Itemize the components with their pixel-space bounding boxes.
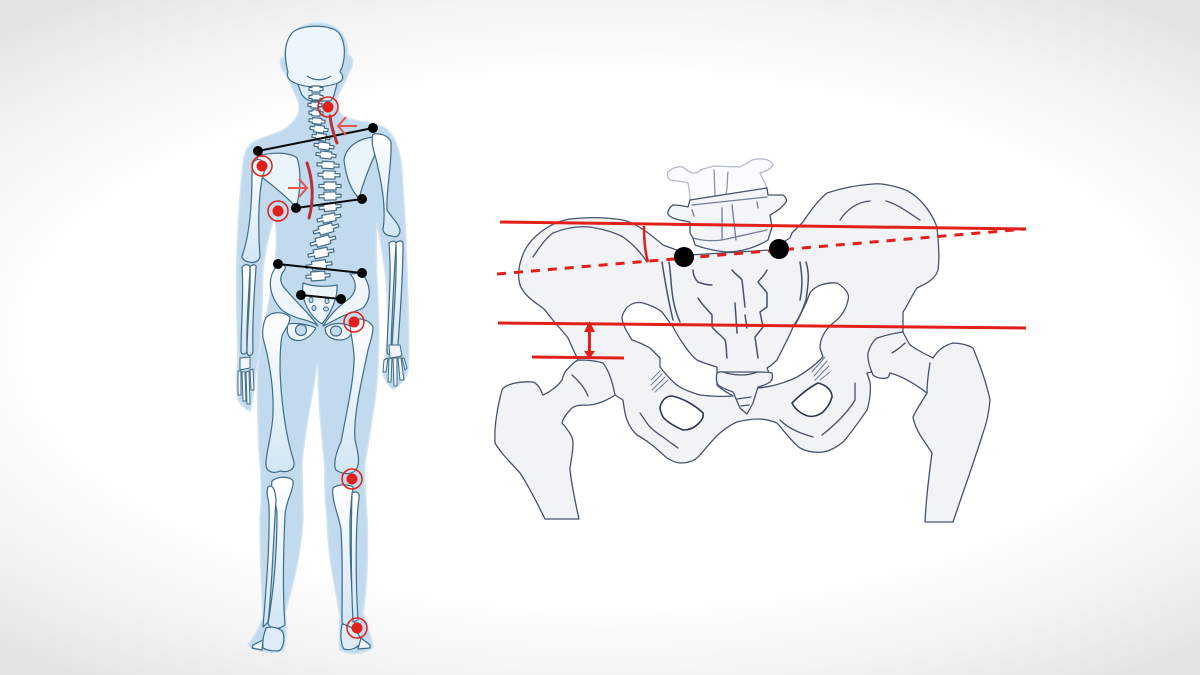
right fibula	[351, 492, 359, 622]
right forearm bones	[387, 241, 396, 354]
sacral foramina lines	[662, 262, 808, 358]
left femur	[495, 360, 615, 519]
right pelvic window	[758, 283, 848, 388]
obturator foramina	[296, 324, 342, 336]
figure: full body skeleton with markers	[236, 23, 409, 654]
left hand bones	[238, 357, 254, 404]
reference line: tilted dashed pelvic axis	[497, 229, 1026, 274]
left pubic bone	[287, 323, 316, 340]
body silhouette	[236, 23, 409, 654]
sacrum	[303, 283, 337, 324]
pain target: rib	[268, 201, 288, 221]
arrow: toward thoracic curve	[288, 179, 307, 197]
reference line: lower level	[498, 323, 1026, 328]
pelvis: left ilium	[270, 265, 318, 326]
coccyx crease	[723, 372, 757, 406]
double arrow: height difference	[584, 321, 595, 359]
left iliac crest inner line	[533, 227, 647, 262]
left foot	[263, 627, 284, 651]
right femur	[868, 332, 990, 522]
sacral foramina	[309, 298, 329, 311]
vertebra detail lines	[692, 197, 767, 241]
right acetabular hatching	[812, 357, 830, 380]
right humerus	[372, 134, 400, 237]
right landmark dot	[769, 239, 789, 259]
jaw curve	[307, 76, 331, 80]
curved muscle strain lines	[307, 116, 337, 218]
right scapula	[344, 137, 377, 198]
right foot	[341, 624, 361, 650]
arrow: toward neck	[338, 117, 357, 135]
pelvis diagram	[495, 159, 1026, 522]
pain target: ankle	[347, 618, 367, 638]
right femur	[335, 319, 373, 474]
left forearm bones	[241, 265, 250, 354]
pain target: neck	[318, 97, 338, 117]
left femur	[263, 313, 294, 472]
left tibia	[268, 477, 293, 629]
left fibula	[263, 486, 276, 627]
pain target: shoulder	[252, 156, 272, 176]
left landmark dot	[674, 247, 694, 267]
pelvis bones illustration	[495, 159, 990, 522]
lower lumbar vertebra	[668, 188, 786, 252]
lower pelvic detail lines	[640, 383, 855, 448]
spine vertebrae	[306, 86, 342, 281]
right tibia	[333, 485, 355, 628]
left pelvic window	[622, 303, 733, 396]
pelvis: right ilium	[323, 273, 369, 326]
reference line: femoral head level	[532, 357, 624, 358]
upper vertebra notch	[714, 170, 728, 198]
coccyx	[716, 372, 772, 414]
left acetabular hatching	[651, 371, 668, 392]
right hand bones	[383, 345, 407, 386]
left humerus	[242, 160, 265, 262]
pelvic girdle	[519, 184, 939, 463]
pain target: hip	[344, 312, 364, 332]
angle marker curve	[644, 226, 648, 262]
femur detail lines	[572, 343, 930, 396]
pain target: knee	[342, 469, 362, 489]
right pubic bone	[325, 324, 354, 340]
left scapula	[257, 153, 300, 207]
skull	[285, 26, 344, 87]
marker lines: shoulder, scapula, iliac and pelvic levels	[253, 123, 378, 304]
right iliac crest inner lines	[840, 201, 920, 220]
right obturator foramen	[792, 383, 832, 416]
left obturator foramen	[660, 396, 703, 430]
skeleton	[238, 26, 407, 651]
upper lumbar vertebra	[668, 159, 773, 200]
reference line: iliac crest level	[500, 222, 1026, 229]
jaw and neck outline	[296, 80, 338, 101]
